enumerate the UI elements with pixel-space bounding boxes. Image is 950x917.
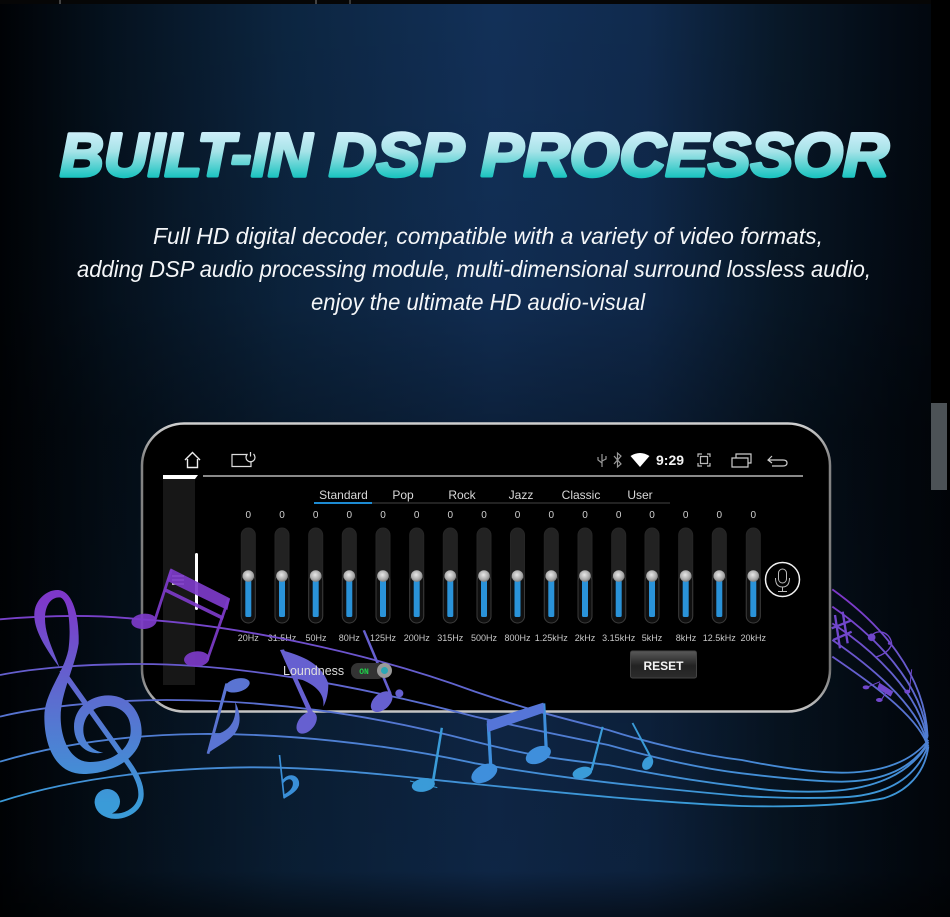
- eq gain values: 0: [549, 510, 555, 521]
- eq preset tabs: Pop: [392, 488, 414, 502]
- sharp sign: [832, 612, 852, 648]
- title: [60, 121, 889, 189]
- eq frequency labels: 5kHz: [642, 633, 663, 643]
- eq frequency labels: 31.5Hz: [268, 633, 297, 643]
- eq frequency labels: 125Hz: [370, 633, 397, 643]
- side panel: [163, 478, 195, 685]
- eq gain values: 0: [649, 510, 655, 521]
- eq preset tabs: Jazz: [509, 488, 533, 502]
- side panel top bar: [163, 475, 198, 479]
- eq preset tabs: Rock: [448, 488, 477, 502]
- note: eighth with flag: [280, 649, 328, 738]
- eq gain values: 0: [717, 510, 723, 521]
- status icons: [598, 453, 621, 467]
- note: small quarter right: [632, 723, 655, 772]
- eq gain values: 0: [582, 510, 588, 521]
- eq preset tabs: Standard: [319, 488, 368, 502]
- eq gain values: 0: [279, 510, 285, 521]
- icon: bluetooth: [614, 453, 621, 467]
- note: beamed purple pair: [131, 568, 230, 668]
- note: beamed blue pair: [468, 703, 554, 787]
- eq gain values: 0: [751, 510, 757, 521]
- title: BUILT-IN: [60, 121, 314, 189]
- loudness toggle: ON: [359, 668, 369, 677]
- eq frequency labels: 800Hz: [504, 633, 531, 643]
- eq frequency labels: 50Hz: [305, 633, 327, 643]
- title: DSP: [329, 121, 464, 189]
- eq sliders: [241, 528, 760, 623]
- stem note: [909, 669, 912, 692]
- eq gain values: 0: [347, 510, 353, 521]
- small notes on rising staff: [832, 612, 912, 702]
- subtitle text block: Full HD digital decoder, compatible with a variety of video formats,: [153, 223, 823, 249]
- note: quarter with ledger: [410, 728, 443, 794]
- eq frequency labels: 8kHz: [676, 633, 697, 643]
- eq gain values: 0: [246, 510, 252, 521]
- reset button: [630, 651, 696, 678]
- eq preset tabs: User: [627, 488, 653, 502]
- eq frequency labels: 80Hz: [339, 633, 360, 643]
- music staff with notes: [0, 568, 928, 816]
- eq frequency labels: [238, 633, 767, 643]
- screen body: [142, 424, 830, 712]
- icon: usb: [598, 454, 606, 467]
- eq preset tabs: Classic: [562, 488, 600, 502]
- eq frequency labels: 500Hz: [471, 633, 498, 643]
- eq frequency labels: 1.25kHz: [535, 633, 568, 643]
- eq gain values: [246, 510, 757, 521]
- icon: back: [768, 456, 787, 466]
- subtitle text block: enjoy the ultimate HD audio-visual: [311, 289, 646, 315]
- reset button: RESET: [643, 659, 684, 673]
- icon: recent apps: [732, 454, 751, 467]
- side panel handle: [195, 553, 198, 610]
- eq frequency labels: 200Hz: [404, 633, 430, 643]
- loudness toggle: [351, 663, 392, 679]
- eq gain values: 0: [616, 510, 622, 521]
- note: eighth blue-violet: [207, 676, 251, 754]
- icon: wifi: [630, 453, 650, 467]
- panel: head unit screen: [142, 424, 830, 712]
- eq gain values: 0: [515, 510, 521, 521]
- note: quarter with dot: [363, 630, 403, 716]
- beamed notes: [863, 685, 869, 689]
- eq gain values: 0: [683, 510, 689, 521]
- eq frequency labels: 2kHz: [575, 633, 596, 643]
- eq frequency labels: 20Hz: [238, 633, 259, 643]
- subtitle text block: [77, 223, 871, 315]
- eq frequency labels: 20kHz: [741, 633, 767, 643]
- eq frequency labels: 12.5kHz: [703, 633, 736, 643]
- icon: screen power: [232, 452, 255, 466]
- flat symbol: [279, 755, 299, 799]
- eq gain values: 0: [414, 510, 420, 521]
- eq gain values: 0: [481, 510, 487, 521]
- treble clef: [34, 590, 142, 816]
- eq gain values: 0: [448, 510, 454, 521]
- title: PROCESSOR: [481, 121, 889, 189]
- eq gain values: 0: [380, 510, 386, 521]
- bass clef note: [872, 632, 892, 657]
- icon: menu: [172, 576, 184, 584]
- icon: home: [185, 452, 200, 468]
- subtitle text block: adding DSP audio processing module, multi-dimensional surround lossless audio,: [77, 256, 871, 282]
- note: quarter right: [571, 727, 604, 781]
- eq frequency labels: 3.15kHz: [602, 633, 636, 643]
- icon: microphone: [766, 562, 800, 596]
- clock: 9:29: [656, 452, 684, 468]
- status bar divider: [203, 475, 803, 477]
- staff lines: [0, 589, 928, 806]
- eq preset tabs: [314, 488, 670, 504]
- icon: fullscreen: [698, 454, 710, 466]
- eq frequency labels: 315Hz: [437, 633, 464, 643]
- eq gain values: 0: [313, 510, 319, 521]
- loudness label: Loundness: [283, 664, 344, 678]
